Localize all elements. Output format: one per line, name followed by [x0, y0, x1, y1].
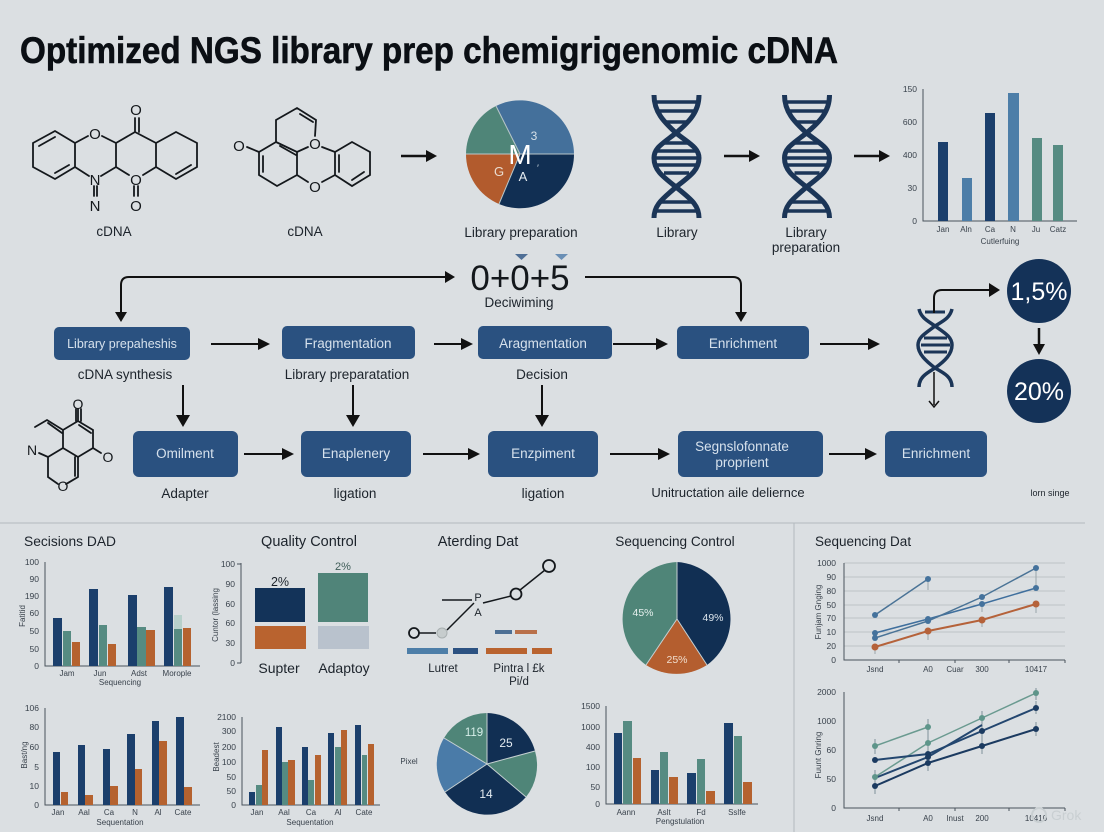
arrow — [829, 448, 877, 460]
chart: line chart bottom: Inust — [946, 814, 964, 823]
panel: top pipeline — [33, 84, 1077, 255]
chart: grouped bars D: 10 — [30, 781, 39, 791]
label: decision: Deciwiming — [484, 295, 554, 310]
label: library preparation 2: Library — [785, 225, 827, 240]
chart: top bar chart: Catz — [1050, 225, 1066, 234]
chart: grouped bars D: Ca — [104, 808, 115, 817]
box: enrichment: Enrichment — [709, 336, 777, 351]
chart: grouped bars A: 100 — [25, 557, 39, 567]
chart: grouped bars E: 300 — [222, 726, 236, 736]
chart: line chart bottom: 10410 — [1025, 814, 1048, 823]
chart: line chart top: Cuar — [946, 665, 964, 674]
chart: grouped bars F: 50 — [591, 782, 600, 792]
chart: grouped bars E: 50 — [227, 772, 236, 782]
label: pixel: Pixel — [400, 757, 418, 766]
chart: pie five slices: 14 — [479, 787, 493, 801]
chart: grouped bars E: Al — [334, 808, 342, 817]
chart: grouped bars D: Aal — [78, 808, 90, 817]
chart: top bar chart: N — [1010, 225, 1016, 234]
arrow down — [535, 385, 549, 427]
metric: 20%: 20% — [1014, 378, 1064, 406]
chart: stacked quality blocks: 90 — [226, 579, 235, 589]
icon: DNA helix 2 — [784, 95, 830, 218]
arrow — [613, 338, 668, 350]
chart: grouped bars E: 50 — [227, 786, 236, 796]
chart: line chart bottom: Fuunt Gnring — [814, 732, 823, 778]
chart: stacked quality blocks: Cuntor (lassing — [211, 588, 220, 642]
chart: grouped bars D: Jan — [52, 808, 64, 817]
chart: top bar chart: 600 — [903, 117, 917, 127]
chart: line chart bottom: A0 — [923, 814, 933, 823]
arrow — [434, 338, 473, 350]
chart: pie with bases: A — [519, 169, 528, 184]
arrow down — [176, 385, 190, 427]
chart: line chart bottom: 1000 — [817, 716, 836, 726]
chart: grouped bars E: Cate — [356, 808, 373, 817]
chart: grouped bars A — [18, 557, 200, 687]
chart: top bar chart: Ca — [985, 225, 996, 234]
chart: stacked quality blocks: 2% — [271, 575, 289, 589]
metric: 20% — [1007, 359, 1071, 423]
arrow — [854, 150, 890, 162]
chart: grouped bars F: Sslfe — [728, 808, 746, 817]
chart: grouped bars F: Fd — [696, 808, 706, 817]
chart: grouped bars E: 2100 — [217, 712, 236, 722]
chart: line chart bottom: 0 — [831, 803, 836, 813]
box: enaplenery: Enaplenery — [322, 446, 390, 461]
title: Optimized NGS library prep chemigrigenomic cDNA — [20, 30, 838, 71]
chart: line with legend bars: A — [474, 607, 482, 619]
chart: grouped bars A: 90 — [30, 574, 39, 584]
chart: grouped bars F: 100 — [586, 762, 600, 772]
heading: Sequencing Control — [615, 534, 735, 549]
chart: line chart bottom: 200 — [975, 814, 989, 823]
heading: Quality Control — [261, 534, 357, 550]
chart: grouped bars A: 50 — [30, 644, 39, 654]
box: enaplenery — [301, 431, 411, 477]
icon: molecule 3: O — [58, 478, 69, 494]
label: lorn singe: lorn singe — [1030, 488, 1070, 498]
chart: line with legend bars: Lutret — [428, 663, 459, 675]
chart: grouped bars D: Al — [154, 808, 162, 817]
chart: line with legend bars: Pi/d — [509, 676, 529, 688]
chart: pie with bases: G — [494, 164, 504, 179]
chart: grouped bars E: Sequentation — [286, 818, 334, 827]
chart: pie five slices: 119 — [465, 727, 483, 739]
arrow down — [346, 385, 360, 427]
chart: grouped bars A: 50 — [30, 626, 39, 636]
arrow — [244, 448, 294, 460]
chart: line chart top: 90 — [827, 572, 836, 582]
chart: line chart top: 20 — [827, 641, 836, 651]
chart: top bar chart — [903, 84, 1077, 246]
chart: stacked quality blocks: 0 — [230, 658, 235, 668]
panel: bottom charts — [18, 534, 1082, 827]
chart: grouped bars F: Pengstulation — [656, 817, 704, 826]
chart: line chart bottom: 50 — [827, 774, 836, 784]
chart: grouped bars E: 200 — [222, 742, 236, 752]
icon: molecule 1: N — [90, 172, 100, 189]
box: enrichment — [677, 326, 809, 359]
label: deliernce: Unitructation aile deliernce — [651, 485, 805, 500]
chart: line chart top: 80 — [827, 586, 836, 596]
icon: molecule 1: O — [130, 102, 142, 119]
chart: pie with bases — [466, 100, 574, 208]
icon: DNA helix 1 — [654, 95, 699, 218]
chart: stacked quality blocks: Adaptoy — [318, 660, 370, 676]
chart: line chart top: 0 — [831, 655, 836, 665]
chart: grouped bars D: Sequentation — [96, 818, 144, 827]
heading: Sequencing Dat — [815, 534, 911, 549]
chart: grouped bars D: Cate — [175, 808, 192, 817]
box: fragmentation: Fragmentation — [304, 336, 392, 351]
box: aragmentation: Aragmentation — [499, 336, 587, 351]
metric: 1,5% — [1007, 259, 1071, 323]
chart: line chart top: 70 — [827, 613, 836, 623]
label: decision: Decision — [516, 367, 568, 382]
chart: line with legend bars: P — [474, 592, 482, 604]
chart: grouped bars A: 0 — [34, 661, 39, 671]
chart: pie five slices: 25 — [499, 736, 513, 750]
label: cDNA synthesis: cDNA synthesis — [78, 367, 173, 382]
chart: line chart top: Funjam Gnging — [814, 585, 823, 639]
box: omilment — [133, 431, 238, 477]
chart: grouped bars D: 80 — [30, 722, 39, 732]
chart: stacked quality blocks — [211, 559, 370, 676]
chart: top bar chart: 0 — [912, 216, 917, 226]
box: library prepaheshis: Library prepaheshis — [67, 337, 177, 351]
icon: molecule 1: O — [130, 198, 142, 215]
heading: Secisions DAD — [24, 534, 116, 549]
chart: grouped bars E: 100 — [222, 757, 236, 767]
chart: stacked quality blocks: 30 — [226, 638, 235, 648]
icon: molecule 1: N — [90, 198, 100, 215]
arrow — [401, 150, 437, 162]
chart: grouped bars A: Sequencing — [99, 678, 141, 687]
panel: workflow — [27, 254, 1071, 501]
arrow — [423, 448, 480, 460]
arrow — [610, 448, 670, 460]
box: enrichment 2 — [885, 431, 987, 477]
chart: top bar chart: Ju — [1032, 225, 1040, 234]
chart: grouped bars F: 0 — [595, 799, 600, 809]
box: library prepaheshis — [54, 327, 190, 360]
label: library: Library — [656, 225, 698, 240]
chart: pie sequencing control — [623, 562, 730, 674]
chart: line chart bottom: 60 — [827, 745, 836, 755]
chart: pie sequencing control: 25% — [666, 654, 688, 666]
chart: line with legend bars: Pintra l £k — [493, 663, 545, 675]
watermark — [1032, 807, 1082, 823]
chart: line chart bottom: 2000 — [817, 687, 836, 697]
chart: top bar chart: Jan — [937, 225, 949, 234]
chart: line chart bottom — [814, 687, 1065, 823]
label: library preparation: Library preparation — [464, 225, 578, 240]
chart: grouped bars D: 60 — [30, 742, 39, 752]
chart: grouped bars A: 60 — [30, 608, 39, 618]
chart: grouped bars F: Aann — [617, 808, 635, 817]
chart: stacked quality blocks: 60 — [226, 599, 235, 609]
box: enzpiment: Enzpiment — [511, 446, 575, 461]
box: aragmentation — [478, 326, 612, 359]
chart: line chart top: 10 — [827, 627, 836, 637]
chart: grouped bars A: Morople — [163, 669, 192, 678]
decision value: 0+0+5 — [470, 259, 570, 298]
chart: grouped bars D: 106 — [25, 703, 39, 713]
label: cDNA 2: cDNA — [287, 224, 323, 239]
chart: grouped bars F — [581, 701, 758, 826]
chart: grouped bars A: Adst — [131, 669, 148, 678]
box: enzpiment — [488, 431, 598, 477]
chart: grouped bars D: 0 — [34, 800, 39, 810]
icon: small DNA with arrows — [918, 283, 1000, 407]
chart: top bar chart: 150 — [903, 84, 917, 94]
chart: grouped bars E: Jan — [251, 808, 263, 817]
chart: pie sequencing control: 45% — [632, 607, 654, 619]
icon: molecule 1: O — [89, 126, 101, 143]
chart: line chart top: 1000 — [817, 558, 836, 568]
chart: grouped bars F: 1000 — [581, 722, 600, 732]
chart: pie with bases: M — [508, 139, 532, 170]
chart: grouped bars E: 0 — [231, 800, 236, 810]
chart: line chart top — [814, 558, 1065, 674]
icon: molecule 2: O — [309, 179, 321, 196]
chart: grouped bars F: Aslt — [657, 808, 671, 817]
label: ligation 2: ligation — [522, 486, 564, 501]
icon: molecule 3: O — [73, 396, 84, 412]
box: segnslofonnate — [678, 431, 823, 477]
chart: top bar chart: 30 — [908, 183, 917, 193]
chart: line chart bottom: Jsnd — [867, 814, 883, 823]
icon: molecule 2 — [233, 108, 370, 196]
chart: grouped bars E: Ca — [306, 808, 317, 817]
icon: molecule 1 — [33, 102, 197, 215]
arrow: feedback left — [115, 271, 455, 322]
chart: line chart top: 50 — [827, 600, 836, 610]
chart: grouped bars A: 190 — [25, 591, 39, 601]
box: fragmentation — [282, 326, 415, 359]
chart: grouped bars E — [212, 712, 380, 827]
chart: grouped bars F: 400 — [586, 742, 600, 752]
chart: top bar chart: 400 — [903, 150, 917, 160]
chart: grouped bars D — [20, 703, 200, 827]
chart: stacked quality blocks: 2% — [335, 561, 351, 573]
chart: pie with bases: ′ — [537, 163, 539, 173]
icon: molecule 3: N — [27, 442, 37, 458]
icon: molecule 3: O — [103, 449, 114, 465]
chart: line chart top: 300 — [975, 665, 989, 674]
chart: stacked quality blocks: Supter — [258, 660, 300, 676]
arrow — [724, 150, 760, 162]
chart: grouped bars D: 5 — [34, 762, 39, 772]
chart: grouped bars A: Jun — [94, 669, 106, 678]
box: enrichment 2: Enrichment — [902, 446, 970, 461]
box: omilment: Omilment — [156, 446, 214, 461]
arrow: feedback right — [585, 277, 747, 322]
label: ligation: ligation — [334, 486, 376, 501]
chart: grouped bars A: Jam — [59, 669, 75, 678]
chart: grouped bars F: 1500 — [581, 701, 600, 711]
icon: molecule 3 — [27, 396, 114, 494]
chart: grouped bars D: N — [132, 808, 138, 817]
box: segnslofonnate: proprient — [715, 455, 769, 470]
label: library preparation 2: preparation — [772, 240, 840, 255]
box: segnslofonnate: Segnslofonnate — [695, 439, 789, 454]
chart: grouped bars D: Bast/ng — [20, 741, 29, 769]
chart: stacked quality blocks: 60 — [226, 618, 235, 628]
watermark: Grok — [1051, 807, 1082, 823]
chart: line with legend bars — [407, 560, 555, 688]
chart: top bar chart: Aln — [960, 225, 972, 234]
label: library preparatation: Library preparatation — [285, 367, 409, 382]
chart: pie with bases: 3 — [531, 129, 538, 143]
chart: grouped bars A: Fatitid — [18, 605, 27, 627]
chart: grouped bars E: Beadest — [212, 742, 221, 772]
chart: pie five slices — [437, 713, 537, 815]
arrow — [211, 338, 270, 350]
label: adapter: Adapter — [161, 486, 209, 501]
arrow down — [1033, 328, 1045, 355]
icon: molecule 1: O — [130, 172, 142, 189]
chart: line chart top: Jsnd — [867, 665, 883, 674]
icon: molecule 2: O — [233, 138, 245, 155]
chart: pie sequencing control: 49% — [702, 612, 724, 624]
chart: line chart top: A0 — [923, 665, 933, 674]
chart: stacked quality blocks: 100 — [221, 559, 235, 569]
chart: grouped bars E: Aal — [278, 808, 290, 817]
metric: 1,5%: 1,5% — [1011, 278, 1067, 306]
icon: molecule 2: O — [309, 136, 321, 153]
chart: line chart top: 10417 — [1025, 665, 1048, 674]
arrow — [820, 338, 880, 350]
label: library preparation 2 — [772, 225, 840, 255]
chart: top bar chart: Cutlerfuing — [981, 237, 1019, 246]
label: cDNA: cDNA — [96, 224, 132, 239]
heading: Aterding Dat — [438, 534, 518, 550]
